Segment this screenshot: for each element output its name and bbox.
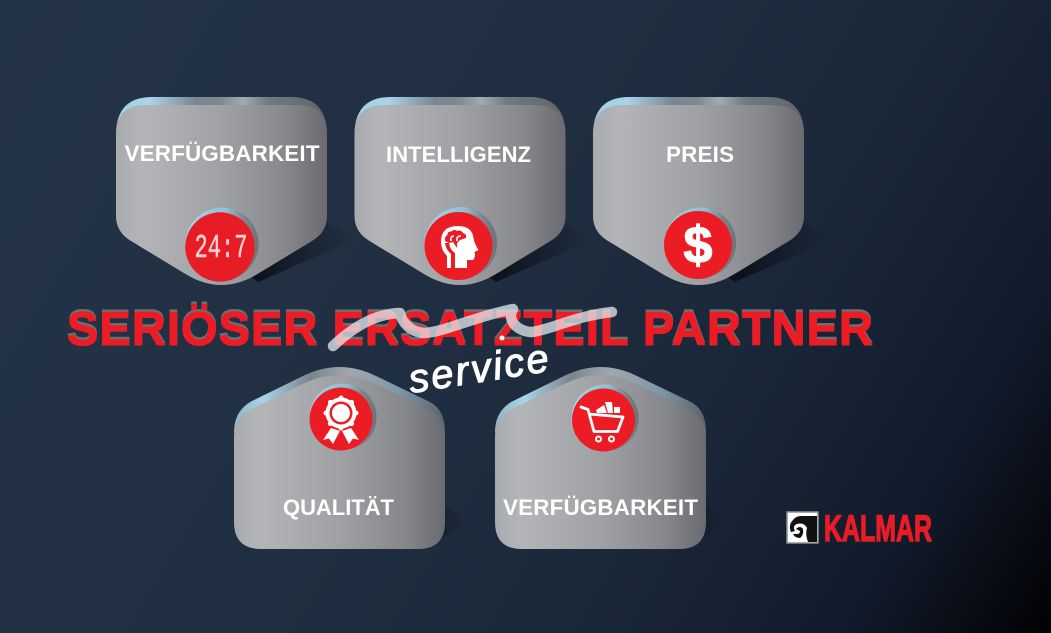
icon: 24:7 clock badge: 24:7	[194, 230, 248, 267]
headline: SERIÖSER ERSATZTEIL PARTNER	[67, 300, 873, 352]
label: Intelligenz: INTELLIGENZ	[386, 142, 531, 167]
label: Verfügbarkeit: VERFÜGBARKEIT	[503, 495, 698, 520]
card: Preis	[593, 97, 831, 285]
label: Preis: PREIS	[666, 142, 734, 167]
card: Intelligenz	[354, 97, 592, 285]
card: Qualität	[234, 367, 468, 549]
icon: dollar sign: $	[684, 216, 713, 274]
headline: SERIÖSER ERSATZTEIL PARTNER	[67, 302, 873, 355]
scribble strike-through	[333, 309, 612, 346]
icon: dollar sign	[664, 208, 736, 279]
card: Verfügbarkeit shopping	[495, 367, 729, 549]
icon: 24:7 clock badge	[185, 208, 258, 282]
icon: head with brain	[424, 207, 497, 280]
logo wordmark: KALMAR	[824, 508, 932, 549]
handwritten word: service: service	[406, 336, 552, 402]
label: Verfügbarkeit: VERFÜGBARKEIT	[124, 141, 320, 166]
label: Qualität: QUALITÄT	[283, 495, 395, 520]
icon: shopping cart	[572, 384, 638, 452]
logo: Kalmar	[787, 508, 932, 549]
icon: award rosette	[310, 384, 376, 450]
card: Verfügbarkeit 24:7	[116, 97, 354, 285]
logo mark: ram head	[787, 512, 818, 543]
